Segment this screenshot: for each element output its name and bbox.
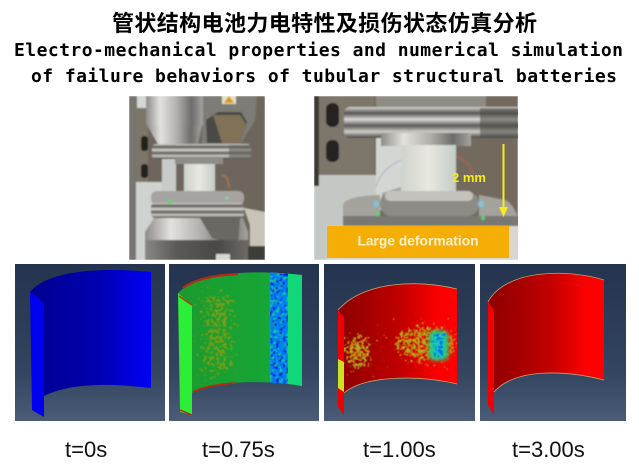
callout: large deformation bbox=[327, 226, 509, 258]
panel: simulation at t=1.00s bbox=[324, 264, 475, 421]
arrow: 2 mm displacement bbox=[452, 144, 508, 217]
panel: simulation at t=3.00s bbox=[480, 264, 626, 421]
arrow: 2 mm displacement: 2 mm bbox=[452, 170, 486, 185]
time labels: t=0s bbox=[65, 437, 107, 462]
panel: simulation at t=0.75s bbox=[169, 264, 319, 421]
title: English bbox=[14, 40, 623, 87]
callout: large deformation: Large deformation bbox=[357, 234, 479, 248]
time labels: t=0.75s bbox=[202, 437, 275, 462]
title: English: of failure behaviors of tubular structural batteries bbox=[31, 66, 617, 87]
panel: simulation at t=0s bbox=[15, 264, 165, 421]
time labels bbox=[65, 437, 585, 462]
time labels: t=1.00s bbox=[363, 437, 436, 462]
title: Chinese: 管状结构电池力电特性及损伤状态仿真分析 bbox=[112, 11, 537, 36]
title: English: Electro-mechanical properties and numerical simulation bbox=[14, 40, 623, 61]
photo: test machine before deformation bbox=[129, 96, 265, 260]
time labels: t=3.00s bbox=[512, 437, 585, 462]
photo: test machine under large deformation bbox=[314, 96, 528, 260]
